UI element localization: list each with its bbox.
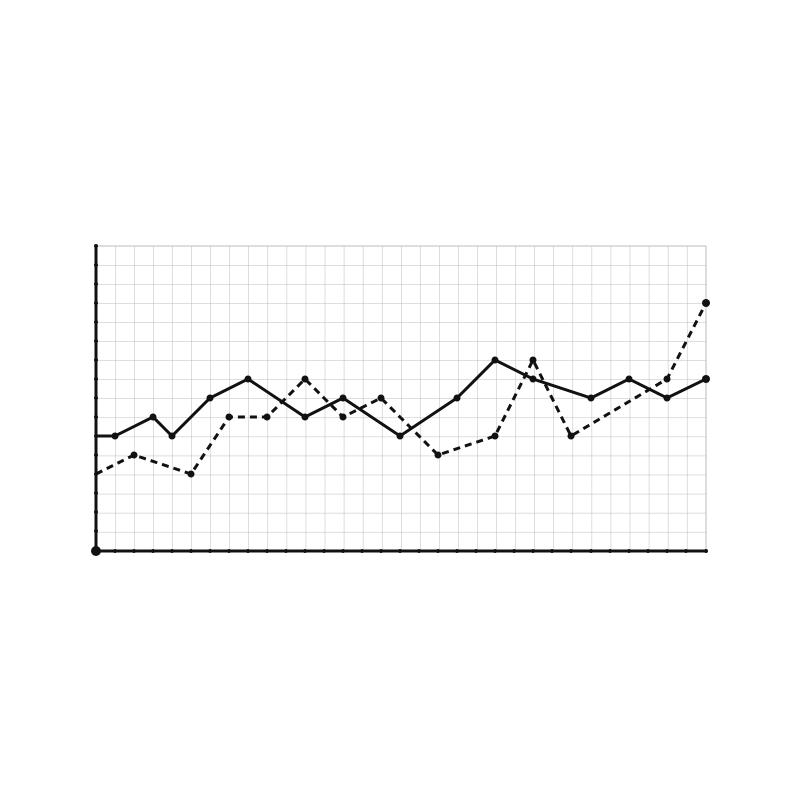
dashed series — [96, 299, 710, 478]
grid — [96, 246, 706, 551]
solid series — [96, 356, 710, 440]
axes — [92, 244, 708, 556]
